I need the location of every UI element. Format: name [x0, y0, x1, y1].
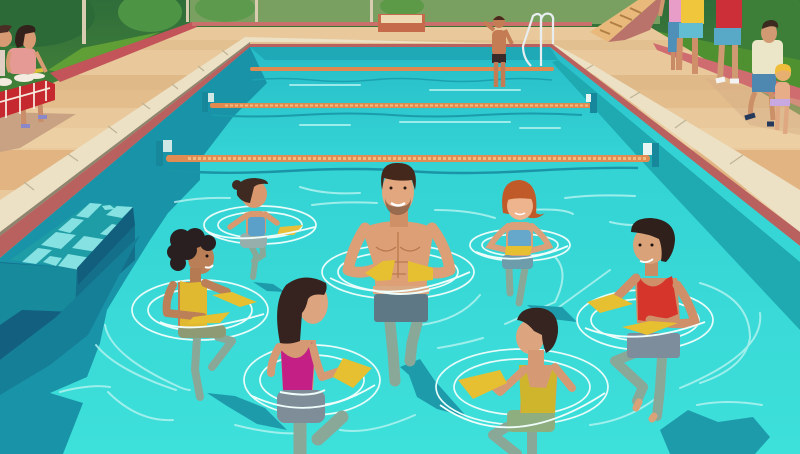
person shadows right deck [705, 78, 800, 135]
front ripple arcs [160, 227, 705, 427]
child 5: girl with pink swimsuit [271, 277, 372, 454]
submerged steps [0, 203, 140, 395]
ripple rings [132, 206, 713, 425]
deck shadow patch [0, 112, 76, 152]
picnic table with red cloth [0, 70, 55, 126]
brick pool edge [0, 44, 800, 258]
pool coping [0, 37, 800, 236]
child 3: curly hair, yellow suit [167, 228, 257, 397]
pool deck [0, 27, 800, 260]
child 4: red tank top boy [587, 218, 695, 419]
right deep band [552, 60, 800, 330]
wooden slide [590, 0, 665, 42]
top dark band [250, 47, 558, 60]
diving block [378, 14, 425, 32]
pool shadows [207, 282, 770, 454]
pool ladder [523, 14, 553, 66]
person: standing swimmer at far end [484, 16, 512, 87]
spectators on left [0, 25, 46, 76]
lane ropes and anchors [156, 67, 659, 173]
spectators on right [660, 0, 791, 134]
deck brick border left [50, 22, 197, 82]
deck brick border right [653, 43, 800, 107]
child 2: red hair girl [490, 180, 549, 303]
background: garden [0, 0, 800, 130]
child 6: boy with yellow suit from back [458, 308, 572, 454]
left deep band [0, 47, 267, 454]
deck brick border top [192, 22, 592, 26]
child 1: back, blue swimsuit [230, 178, 303, 277]
water ripples [60, 85, 762, 433]
instructor [348, 163, 450, 381]
